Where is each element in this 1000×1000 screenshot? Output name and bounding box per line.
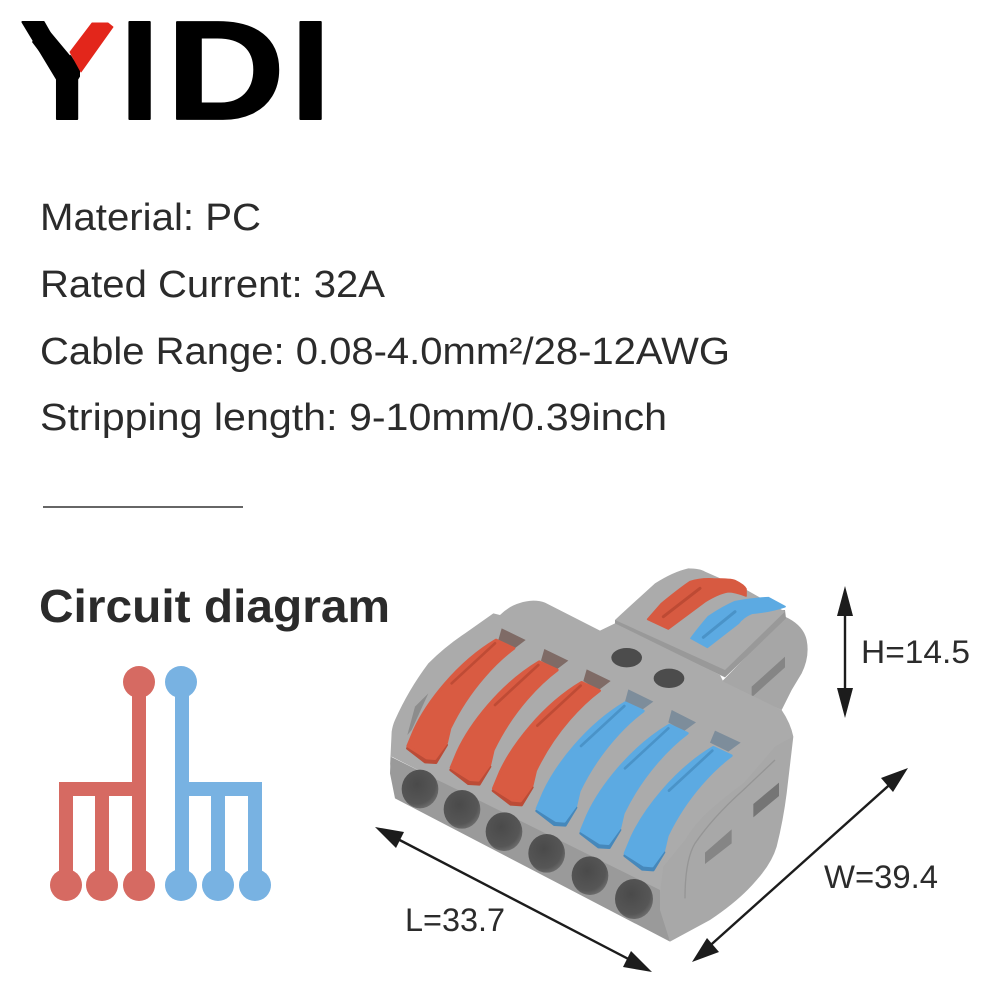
module red lever xyxy=(648,579,746,629)
blue lever 5 xyxy=(581,725,687,848)
main body xyxy=(390,601,793,942)
logo: YIDI xyxy=(20,0,330,149)
circuit diagram icon xyxy=(50,666,271,901)
module plate front edge xyxy=(615,610,786,677)
left shadow by first lever xyxy=(407,693,428,735)
wire holes xyxy=(402,770,653,919)
small top module xyxy=(615,568,808,710)
label: L=33.7: L=33.7 xyxy=(405,902,505,938)
right side face xyxy=(653,733,793,942)
module red ridge xyxy=(663,588,700,617)
lever slots xyxy=(498,628,741,752)
top surface xyxy=(390,601,793,893)
dimension arrow: length xyxy=(375,827,652,972)
blue lever 6 xyxy=(625,747,731,870)
spec: stripping length: Stripping length: 9-10mm/0.39inch xyxy=(40,397,667,439)
spec: rated current: Rated Current: 32A xyxy=(40,264,386,306)
spec: material: Material: PC xyxy=(40,197,261,239)
red levers xyxy=(407,640,600,805)
label: H=14.5: H=14.5 xyxy=(861,634,970,670)
blue levers xyxy=(537,703,731,870)
specifications text block xyxy=(40,197,730,439)
side seam line xyxy=(685,760,775,898)
label: W=39.4: W=39.4 xyxy=(824,859,938,895)
red circuit xyxy=(50,666,155,901)
connector product illustration xyxy=(390,568,808,942)
heading: circuit diagram: Circuit diagram xyxy=(39,580,390,632)
blue lever 4 xyxy=(537,703,643,825)
top mounting holes xyxy=(611,648,642,667)
blue circuit xyxy=(165,666,271,901)
module blue ridge xyxy=(703,612,735,637)
red lever 1 xyxy=(407,640,514,763)
module plate top xyxy=(615,568,785,670)
red lever 2 xyxy=(451,662,557,784)
dimension arrow: height xyxy=(837,586,853,718)
front face xyxy=(390,757,670,942)
spec: cable range: Cable Range: 0.08-4.0mm²/28-12AWG xyxy=(40,331,730,373)
red lever 3 xyxy=(493,682,600,805)
module blue lever xyxy=(691,598,785,647)
dimension arrow: width xyxy=(692,768,908,962)
side slots xyxy=(705,829,732,864)
module side slot xyxy=(752,657,785,697)
module side face xyxy=(720,617,808,710)
